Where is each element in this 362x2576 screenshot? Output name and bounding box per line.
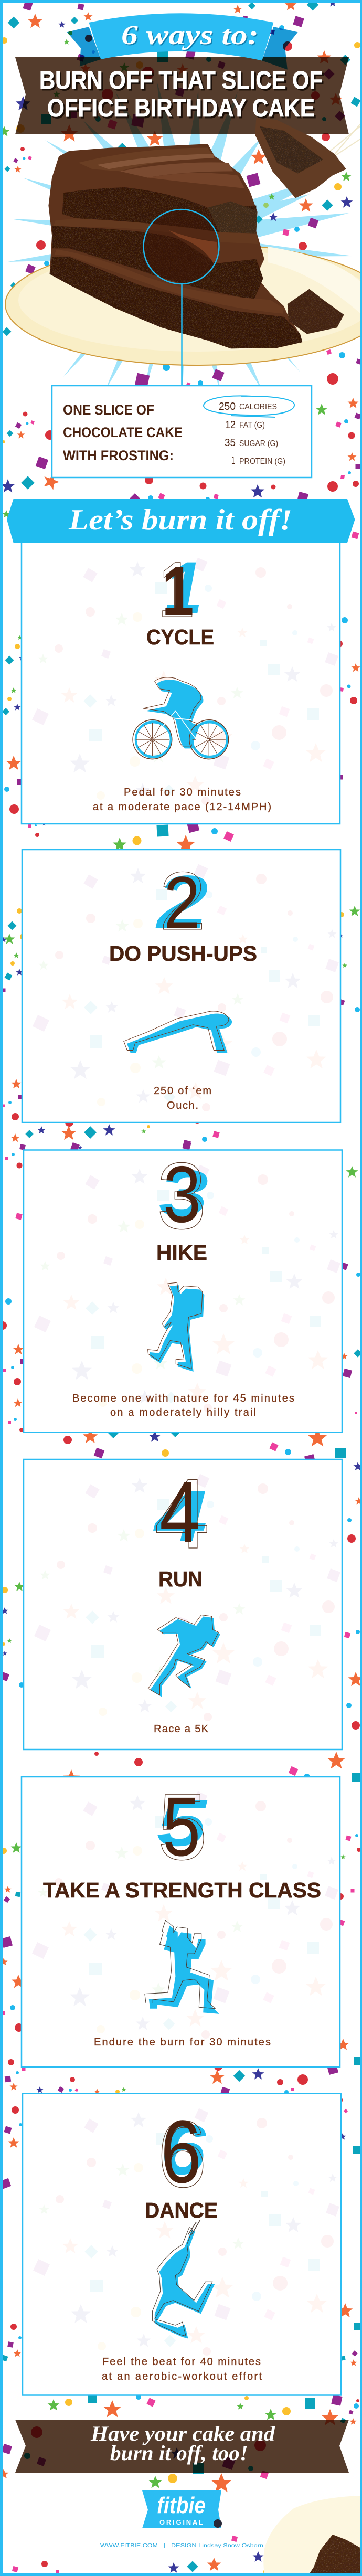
number 2: 2 xyxy=(164,862,200,944)
icon: cyclist xyxy=(133,677,229,759)
panel: nutrition facts xyxy=(52,386,312,478)
heading: cycle: CYCLE xyxy=(146,625,214,649)
nutrition list: 35 xyxy=(225,437,236,449)
banner: burn off title xyxy=(15,57,349,134)
icon: dancer xyxy=(152,2220,215,2339)
number 2: 2 xyxy=(155,860,208,944)
number 6: 6 xyxy=(157,2102,207,2207)
panel: 1 cycle xyxy=(22,535,340,824)
ribbon: 6 ways to xyxy=(67,13,298,70)
text: dance xyxy=(102,2356,262,2382)
logo: fitbie original xyxy=(142,2490,222,2528)
sunburst rays xyxy=(8,81,353,391)
panel: 6 dance xyxy=(23,2094,341,2395)
banner: burn off title: OFFICE BIRTHDAY CAKE xyxy=(47,94,315,122)
text: hike: on a moderately hilly trail xyxy=(110,1407,256,1418)
number 3: 3 xyxy=(159,1157,208,1230)
logo: fitbie original: fitbie xyxy=(157,2493,206,2518)
ribbon: 6 ways to: 6 ways to: xyxy=(121,20,259,50)
cake slice xyxy=(48,144,344,348)
heading: strength class: TAKE A STRENGTH CLASS xyxy=(43,1878,321,1902)
text: dance: Feel the beat for 40 minutes xyxy=(102,2356,261,2368)
number 1: 1 xyxy=(165,547,203,629)
nutrition list: 12 xyxy=(225,419,236,431)
number 5: 5 xyxy=(157,1786,208,1860)
number 4: 4 xyxy=(154,1458,210,1570)
number 2: 2 xyxy=(159,855,206,947)
footer credits xyxy=(100,2542,263,2549)
number 5: 5 xyxy=(158,1774,207,1879)
text: run: Race a 5K xyxy=(154,1723,209,1735)
heading: one slice: ONE SLICE OF xyxy=(63,402,154,418)
text: push-ups: Ouch. xyxy=(167,1100,198,1111)
banner: burn off title: BURN OFF THAT SLICE OF xyxy=(39,67,323,94)
text: push-ups xyxy=(154,1085,211,1111)
nutrition list: CALORIES xyxy=(239,402,277,411)
nutrition list: 250 xyxy=(219,401,236,412)
banner: let's burn it off: Let’s burn it off! xyxy=(68,504,292,536)
icon: hiker xyxy=(148,1282,204,1372)
banner: burn off title: BURN OFF THAT SLICE OF xyxy=(41,68,324,96)
callout circle and connector xyxy=(144,209,219,386)
number 4: 4 xyxy=(159,1464,200,1561)
ribbon: 6 ways to: 6 ways to: xyxy=(122,22,260,51)
heading: one slice xyxy=(63,402,183,463)
number 6: 6 xyxy=(161,2109,206,2189)
heading: hike: HIKE xyxy=(156,1241,207,1265)
icon: lunge with weights xyxy=(145,1920,219,2014)
heading: one slice: CHOCOLATE CAKE xyxy=(63,425,183,440)
calorie ring xyxy=(204,396,294,417)
icon: push-up figure xyxy=(124,1011,232,1053)
text: cycle xyxy=(93,787,271,813)
banner: have your cake xyxy=(15,2420,349,2473)
panel: 2 push-ups xyxy=(22,850,340,1122)
heading: one slice: WITH FROSTING: xyxy=(63,448,174,463)
heading: run: RUN xyxy=(158,1567,203,1591)
heading: dance: DANCE xyxy=(145,2198,218,2222)
plate and crumbs: bottom corner xyxy=(263,2496,362,2576)
number 6: 6 xyxy=(161,2102,201,2201)
banner: have your cake: Have your cake and xyxy=(90,2422,275,2445)
nutrition list: PROTEIN (G) xyxy=(239,457,285,466)
plate xyxy=(5,243,362,365)
footer credits: | xyxy=(164,2542,165,2549)
nutrition list xyxy=(219,401,285,467)
banner: let's burn it off xyxy=(7,499,355,543)
footer credits: WWW.FITBIE.COM xyxy=(100,2542,158,2549)
text: hike: Become one with nature for 45 minutes xyxy=(72,1393,294,1404)
panel: 5 strength class xyxy=(22,1774,340,2067)
number 3: 3 xyxy=(163,1149,201,1238)
footer credits: DESIGN Lindsay Snow Osborn xyxy=(171,2542,263,2549)
number 1: 1 xyxy=(162,552,194,630)
number 4: 4 xyxy=(153,1476,207,1556)
banner: have your cake: burn it off, too! xyxy=(110,2441,248,2465)
text: dance: at an aerobic-workout effort xyxy=(102,2371,262,2382)
text: cycle: Pedal for 30 minutes xyxy=(124,787,241,798)
panel: 3 hike xyxy=(24,1144,342,1433)
heading: push-ups: DO PUSH-UPS xyxy=(109,941,257,966)
fork with cake bite xyxy=(255,118,360,198)
number 5: 5 xyxy=(163,1779,200,1873)
panel: 4 run xyxy=(24,1458,342,1750)
nutrition list: SUGAR (G) xyxy=(239,439,278,448)
nutrition list: FAT (G) xyxy=(239,421,265,430)
icon: runner xyxy=(148,1615,220,1697)
number 1: 1 xyxy=(157,545,195,633)
text: cycle: at a moderate pace (12-14MPH) xyxy=(93,801,271,813)
number 3: 3 xyxy=(157,1144,206,1249)
text: strength: Endure the burn for 30 minutes xyxy=(94,2037,271,2048)
text: hike xyxy=(72,1393,294,1418)
banner: burn off title: OFFICE BIRTHDAY CAKE xyxy=(49,96,316,124)
logo: fitbie original: ORIGINAL xyxy=(159,2518,203,2526)
nutrition list: 1 xyxy=(231,455,235,467)
text: push-ups: 250 of ‘em xyxy=(154,1085,211,1097)
